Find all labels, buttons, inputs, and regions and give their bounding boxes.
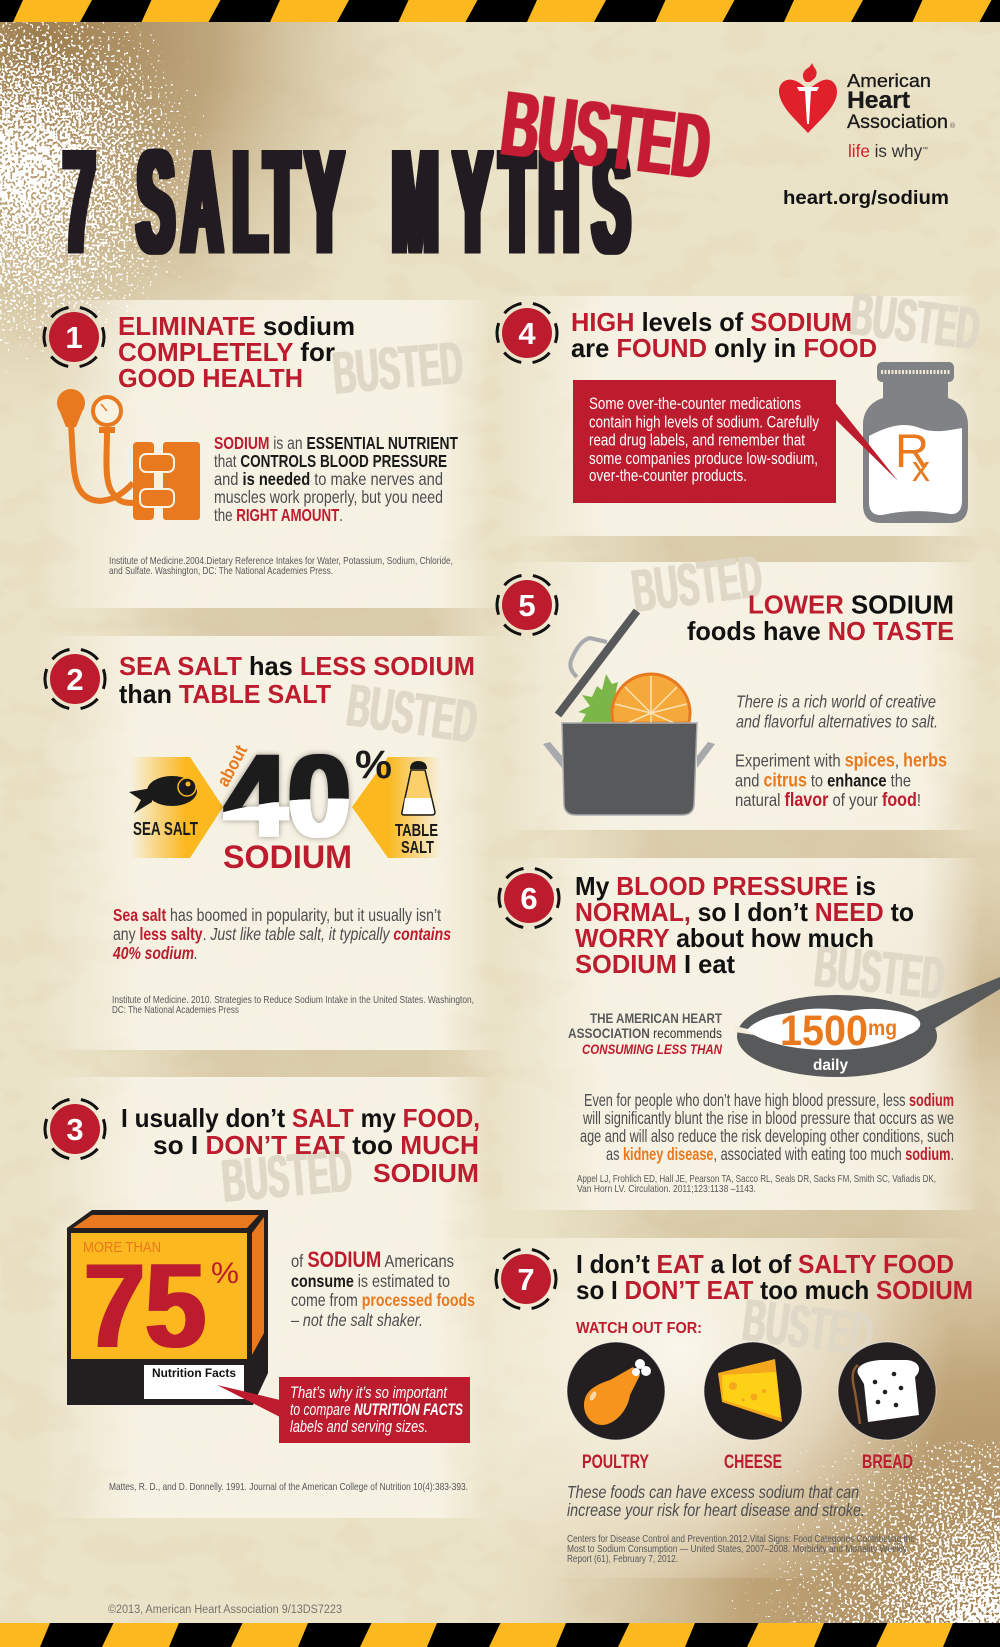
about: about [213, 742, 251, 790]
body text: SODIUM is an ESSENTIAL NUTRIENT [214, 433, 458, 453]
food labels [582, 1451, 913, 1473]
heading: SEA SALT has LESS SODIUM [119, 651, 475, 681]
food labels: BREAD [862, 1451, 913, 1473]
heading: My BLOOD PRESSURE is [575, 871, 876, 901]
number badge [37, 1091, 113, 1167]
top hazard stripe [0, 0, 1000, 22]
heading [576, 1249, 973, 1305]
icon: food box [67, 1210, 268, 1405]
tagline: life is why [848, 141, 923, 161]
orange slice [612, 674, 690, 723]
icon: pot with herbs and citrus [543, 611, 715, 815]
panel: myth 5 [489, 543, 954, 815]
citation: Centers for Disease Control and Prevention.2012.Vital Signs: Food Categories Contributing the [567, 1533, 915, 1545]
heading: LOWER SODIUM [748, 590, 954, 620]
busted watermark: BUSTED [739, 1286, 877, 1369]
body text: natural flavor of your food! [735, 790, 921, 811]
amount: 1500 [780, 1007, 868, 1055]
heading [571, 307, 877, 363]
herbs [578, 674, 620, 723]
label: table salt [395, 820, 438, 857]
title: 7 SALTY MYTHS [64, 121, 630, 284]
recommendation text: THE AMERICAN HEART [590, 1010, 722, 1026]
busted watermark: BUSTED [219, 1137, 355, 1215]
number badge: 2 [66, 662, 84, 697]
heading [687, 590, 954, 646]
heading [118, 311, 355, 393]
body text [735, 692, 947, 811]
heading: so I DON’T EAT too much SODIUM [576, 1275, 973, 1305]
icon: poultry [567, 1342, 665, 1440]
panel: myth 2 [37, 641, 481, 1016]
nutrition label: Nutrition Facts [152, 1368, 236, 1380]
number badge [491, 860, 567, 936]
organisation name: American [847, 70, 931, 91]
panel: myth 4 [489, 280, 984, 523]
percent: % [355, 743, 392, 787]
panel: myth 7 [488, 1241, 973, 1565]
daily: daily [813, 1057, 848, 1074]
heading: NORMAL, so I don’t NEED to [575, 897, 914, 927]
icon: cheese [704, 1342, 802, 1440]
body text: and is needed to make nerves and [214, 469, 443, 489]
body text: increase your risk for heart disease and stroke. [567, 1500, 865, 1520]
food labels: POULTRY [582, 1451, 649, 1473]
panel backgrounds [40, 296, 1000, 1578]
callout: medications: some companies produce low-sodium, [589, 450, 818, 468]
citation [567, 1533, 915, 1565]
heading: are FOUND only in FOOD [571, 333, 877, 363]
40 number black and white: 40 [224, 731, 351, 861]
heading: than TABLE SALT [119, 679, 331, 709]
icon: blood pressure cuff [57, 389, 200, 520]
busted watermark: BUSTED [628, 543, 766, 625]
heading: HIGH levels of SODIUM [571, 307, 852, 337]
label: table salt: TABLE [395, 820, 438, 840]
citation: Institute of Medicine. 2010. Strategies to Reduce Sodium Intake in the United States. Washington, [112, 994, 474, 1006]
body text [290, 1247, 475, 1330]
icon: heart with torch [779, 63, 837, 133]
watch out for: WATCH OUT FOR: [576, 1320, 702, 1337]
number badge [489, 295, 565, 371]
unit: mg [868, 1017, 897, 1040]
callout: medications: read drug labels, and remember that [589, 432, 805, 450]
body text [214, 433, 458, 525]
body text: the RIGHT AMOUNT. [214, 505, 343, 525]
40 number black and white [220, 750, 352, 842]
body text: come from processed foods [291, 1290, 475, 1310]
body text: Sea salt has boomed in popularity, but it usually isn’t [113, 905, 441, 925]
heading: COMPLETELY for [118, 337, 335, 367]
number badge [37, 641, 113, 717]
body text: muscles work properly, but you need [214, 487, 443, 507]
icon: salt shaker [402, 761, 435, 815]
salt speckle top left [0, 22, 320, 422]
number badge: 4 [518, 316, 536, 351]
sea salt arrow [130, 757, 223, 858]
citation: DC: The National Academies Press [112, 1004, 239, 1016]
icon: fish [129, 776, 197, 813]
url: heart.org/sodium [783, 188, 949, 209]
more than: MORE THAN [83, 1240, 161, 1256]
heading: I usually don’t SALT my FOOD, [121, 1103, 480, 1133]
number badge: 6 [520, 881, 538, 916]
number badge: 5 [518, 588, 536, 623]
citation [109, 555, 453, 577]
body text [112, 905, 451, 963]
recommendation text: ASSOCIATION recommends [568, 1025, 722, 1041]
callout: medications [573, 380, 898, 503]
citation: Report (61), February 7, 2012. [567, 1553, 678, 1565]
number badge [489, 567, 565, 643]
table salt arrow [352, 757, 442, 858]
logo: American Heart Association [779, 63, 956, 209]
organisation name: Heart [847, 87, 910, 114]
body text: as kidney disease, associated with eating too much sodium. [606, 1144, 954, 1164]
body text [567, 1482, 865, 1520]
heading: ELIMINATE sodium [118, 311, 355, 341]
body text: and citrus to enhance the [735, 770, 911, 792]
heading: GOOD HEALTH [118, 363, 303, 393]
lid handle [570, 638, 607, 677]
body text: and flavorful alternatives to salt. [736, 712, 938, 732]
citation [577, 1173, 936, 1195]
body text: of SODIUM Americans [291, 1247, 454, 1272]
label: sea salt: SEA SALT [133, 819, 198, 839]
busted watermark: BUSTED [330, 329, 466, 407]
75: 75 [84, 1239, 206, 1373]
pot body [562, 723, 697, 815]
body text: Experiment with spices, herbs [735, 750, 947, 772]
heading: SODIUM [373, 1158, 479, 1188]
body text [580, 1090, 954, 1164]
citation [112, 994, 474, 1016]
body text: consume is estimated to [291, 1271, 450, 1291]
body text: 40% sodium. [112, 943, 198, 963]
callout: compare labels: That’s why it’s so important [290, 1384, 448, 1402]
callout: medications: Some over-the-counter medications [589, 395, 801, 413]
body text: that CONTROLS BLOOD PRESSURE [214, 451, 447, 471]
icon: bread [838, 1342, 936, 1440]
body text: – not the salt shaker. [290, 1310, 423, 1330]
icon: spoon with 1500mg [735, 977, 1000, 1077]
number badge: 1 [65, 320, 83, 355]
panel: myth 3 [37, 1091, 480, 1493]
organisation name [847, 70, 956, 133]
heading: WORRY about how much [575, 923, 874, 953]
heading: so I DON’T EAT too MUCH [153, 1130, 479, 1160]
icon: medicine bottle: x [912, 448, 930, 489]
recommendation text [568, 1010, 723, 1057]
sodium: SODIUM [223, 839, 352, 875]
recommendation text: CONSUMING LESS THAN [582, 1041, 723, 1057]
pot lid [558, 611, 637, 715]
callout: medications: over-the-counter products. [589, 467, 747, 485]
citation: Most to Sodium Consumption — United States, 2007–2008. Morbidity and Mortality Weekly [567, 1543, 908, 1555]
panel: myth 1 [36, 299, 466, 577]
organisation name: Association [847, 111, 948, 133]
food labels: CHEESE [724, 1451, 782, 1473]
copyright: ©2013, American Heart Association 9/13DS7223 [108, 1604, 342, 1616]
citation: Institute of Medicine.2004.Dietary Reference Intakes for Water, Potassium, Sodium, Chloride, [109, 555, 453, 567]
tagline: ™ [922, 146, 928, 153]
body text: any less salty. Just like table salt, it typically contains [113, 924, 451, 944]
busted watermark: BUSTED [343, 672, 481, 756]
body text: These foods can have excess sodium that can [567, 1482, 859, 1502]
rx: R [895, 424, 929, 477]
number badge [36, 299, 112, 375]
body text: There is a rich world of creative [736, 692, 936, 712]
heading [121, 1103, 480, 1188]
number badge: 3 [66, 1112, 84, 1147]
heading: SODIUM I eat [575, 949, 735, 979]
number badge: 7 [517, 1262, 535, 1297]
icon: medicine bottle [863, 362, 968, 523]
citation: and Sulfate. Washington, DC: The National Academies Press. [109, 565, 333, 577]
bottom hazard stripe [0, 1623, 1000, 1647]
percent sign: % [211, 1257, 239, 1290]
callout: compare labels: labels and serving sizes. [290, 1418, 428, 1436]
label: table salt: SALT [401, 837, 434, 857]
callout: medications: contain high levels of sodium. Carefully [589, 414, 820, 432]
callout: compare labels [217, 1377, 470, 1443]
callout: compare labels: to compare NUTRITION FACTS [290, 1401, 463, 1419]
heading [575, 871, 914, 979]
heading: I don’t EAT a lot of SALTY FOOD [576, 1249, 954, 1279]
salt speckle bottom right [680, 1440, 1000, 1624]
stamp: BUSTED red: BUSTED [497, 73, 715, 199]
40 number black and white: 40 [224, 731, 351, 861]
number badge [488, 1241, 564, 1317]
heading [119, 651, 475, 709]
pot handles [543, 742, 562, 768]
graphic: sea salt vs table salt 40 percent [129, 744, 440, 868]
citation: Van Horn LV. Circulation. 2011;123:1138 –1143. [577, 1183, 756, 1195]
organisation name: ® [950, 122, 956, 130]
panel: myth 6 [491, 860, 1000, 1195]
heading: foods have NO TASTE [687, 616, 954, 646]
nutrition label [144, 1365, 244, 1399]
citation: Mattes, R. D., and D. Donnelly. 1991. Journal of the American College of Nutrition 10(4):383-393. [109, 1481, 468, 1493]
